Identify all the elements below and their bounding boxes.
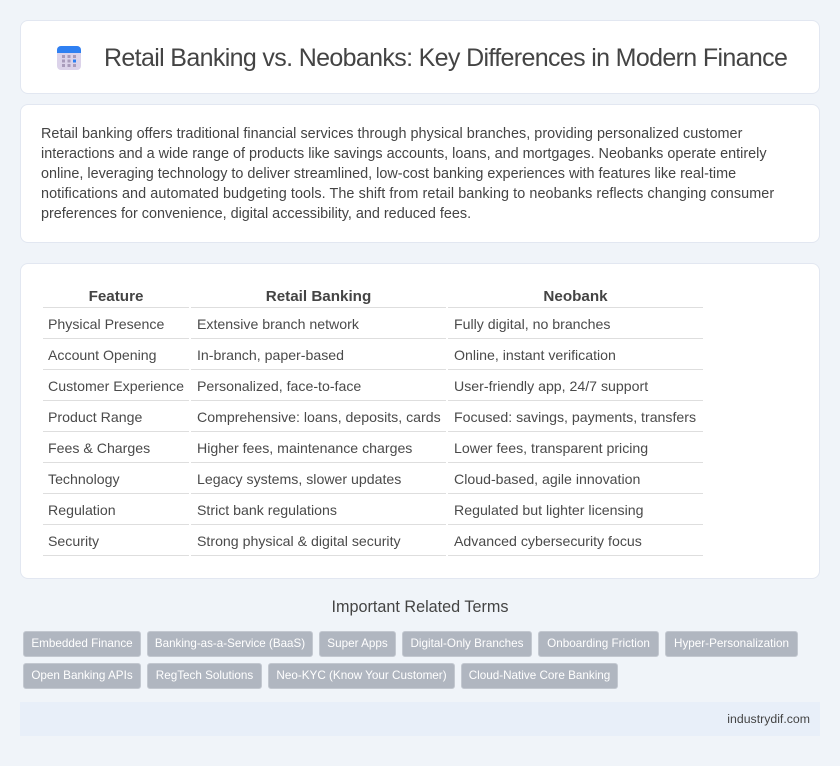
- panel: summary: [20, 104, 820, 243]
- related term tags: [23, 631, 798, 689]
- heading: related terms: Important Related Terms: [332, 598, 508, 616]
- row: technology: Legacy systems, slower updates: [197, 471, 401, 487]
- panel: comparison table: [20, 263, 820, 579]
- tag: RegTech Solutions: [156, 669, 253, 682]
- summary text: notifications and automated budgeting tools. The shift from retail banking to neobanks reflects changing consumer: [41, 186, 774, 202]
- tag: Onboarding Friction: [547, 637, 650, 650]
- header: retail banking: Retail Banking: [266, 288, 371, 305]
- row: regulation: Regulated but lighter licensing: [454, 502, 643, 518]
- row: regulation: Regulation: [48, 502, 116, 518]
- summary text: online, leveraging technology to deliver streamlined, low-cost banking experiences with features like real-time: [41, 166, 736, 182]
- tag: Digital-Only Branches: [410, 637, 524, 650]
- row: physical presence: [48, 316, 610, 332]
- tag: [461, 663, 618, 689]
- tag: [665, 631, 798, 657]
- tag: Hyper-Personalization: [674, 637, 789, 650]
- summary text: interactions and a wide range of products like savings accounts, loans, and mortgages. Neobanks operate entirely: [41, 146, 767, 162]
- comparison table: [43, 288, 703, 556]
- row: technology: Technology: [48, 471, 120, 487]
- row: customer experience: Customer Experience: [48, 378, 184, 394]
- row: fees and charges: Fees & Charges: [48, 440, 150, 456]
- footer bar: [20, 702, 820, 736]
- row: account opening: [48, 347, 616, 363]
- row: fees and charges: Lower fees, transparent pricing: [454, 440, 648, 456]
- row: physical presence: Extensive branch network: [197, 316, 359, 332]
- tag: Open Banking APIs: [31, 669, 133, 682]
- row: security: Strong physical & digital security: [197, 533, 401, 549]
- row: account opening: Account Opening: [48, 347, 156, 363]
- summary text: [41, 126, 774, 222]
- row: security: Security: [48, 533, 99, 549]
- tag: [268, 663, 455, 689]
- row: technology: [48, 471, 640, 487]
- panel: title header: [20, 20, 820, 94]
- row: regulation: [48, 502, 643, 518]
- tag: [402, 631, 532, 657]
- title: Retail Banking vs. Neobanks: Key Differences in Modern Finance: [104, 44, 787, 72]
- row: technology: Cloud-based, agile innovation: [454, 471, 640, 487]
- tag: Cloud-Native Core Banking: [469, 669, 610, 682]
- tag: [23, 631, 141, 657]
- row: regulation: Strict bank regulations: [197, 502, 337, 518]
- row: physical presence: Physical Presence: [48, 316, 164, 332]
- row: customer experience: Personalized, face-to-face: [197, 378, 361, 394]
- row: account opening: Online, instant verification: [454, 347, 616, 363]
- tag: [23, 663, 141, 689]
- row: product range: Focused: savings, payments, transfers: [454, 409, 696, 425]
- tag: Banking-as-a-Service (BaaS): [155, 637, 305, 650]
- summary text: Retail banking offers traditional financial services through physical branches, providing personalized customer: [41, 126, 742, 142]
- row: security: [48, 533, 642, 549]
- row: product range: Product Range: [48, 409, 142, 425]
- tag: [147, 663, 262, 689]
- tag: Super Apps: [327, 637, 388, 650]
- icon: calendar: [57, 46, 81, 70]
- footer source: industrydif.com: [727, 712, 810, 726]
- row: product range: [48, 409, 696, 425]
- row: account opening: In-branch, paper-based: [197, 347, 344, 363]
- row: product range: Comprehensive: loans, deposits, cards: [197, 409, 441, 425]
- row: fees and charges: Higher fees, maintenance charges: [197, 440, 412, 456]
- row: customer experience: User-friendly app, 24/7 support: [454, 378, 648, 394]
- tag: [319, 631, 396, 657]
- summary text: preferences for convenience, digital accessibility, and reduced fees.: [41, 206, 471, 222]
- tag: [538, 631, 659, 657]
- tag: [147, 631, 313, 657]
- row: security: Advanced cybersecurity focus: [454, 533, 642, 549]
- row: customer experience: [48, 378, 648, 394]
- tag: Embedded Finance: [31, 637, 133, 650]
- row: fees and charges: [48, 440, 648, 456]
- header: neobank: Neobank: [543, 288, 608, 305]
- row: physical presence: Fully digital, no branches: [454, 316, 610, 332]
- tag: Neo-KYC (Know Your Customer): [276, 669, 447, 682]
- header: feature: Feature: [89, 288, 143, 305]
